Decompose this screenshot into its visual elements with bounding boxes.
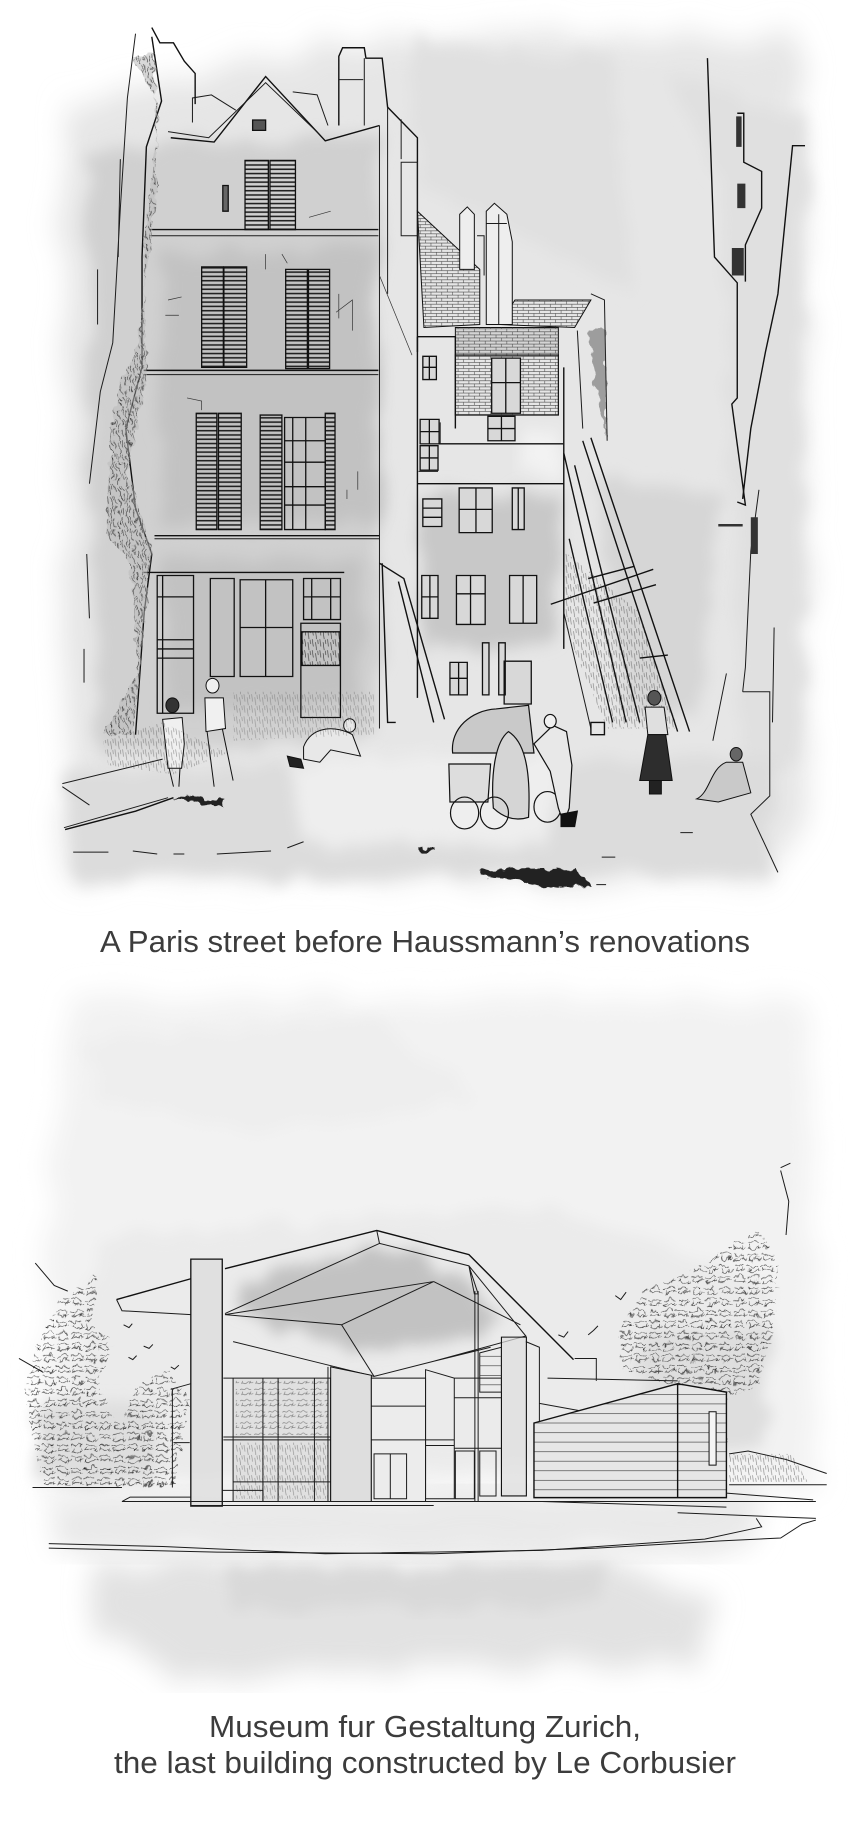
concrete columns	[191, 1259, 526, 1506]
watercolor wash background	[38, 999, 819, 1676]
caption: Museum fur Gestaltung: the last building constructed by Le Corbusier	[114, 1745, 736, 1780]
caption: Museum fur Gestaltung: Museum fur Gestaltung Zurich,	[209, 1709, 641, 1744]
scaffolding ladders	[551, 294, 690, 735]
ground and path lines	[35, 1488, 816, 1554]
shutters and windows	[157, 120, 340, 717]
left tree	[19, 1263, 190, 1488]
birds	[124, 1292, 626, 1369]
caption: Museum fur Gestaltung	[114, 1709, 736, 1780]
illustration: Museum fur Gestaltung Zurich	[19, 999, 827, 1676]
figure: standing woman	[640, 691, 672, 794]
street and cobbles	[62, 692, 693, 888]
right tree	[618, 1163, 827, 1485]
middle buildings and roofs	[417, 203, 591, 704]
figure: handcart with sacks	[449, 705, 577, 829]
museum roof	[117, 1230, 574, 1376]
facade outline and floors	[144, 48, 445, 729]
right side building edge	[707, 58, 805, 872]
illustration: Paris street before renovations	[62, 28, 808, 888]
tenement building	[84, 28, 445, 735]
figure: crouching person	[287, 719, 360, 768]
striped wall	[534, 1384, 726, 1498]
broken party wall	[84, 28, 195, 735]
figure: two boys	[163, 678, 233, 787]
figure: seated person	[697, 747, 751, 802]
glass pavilion	[122, 1342, 678, 1502]
watercolor wash background	[65, 37, 808, 882]
caption: Paris street: A Paris street before Haussmann’s renovations	[100, 924, 750, 959]
